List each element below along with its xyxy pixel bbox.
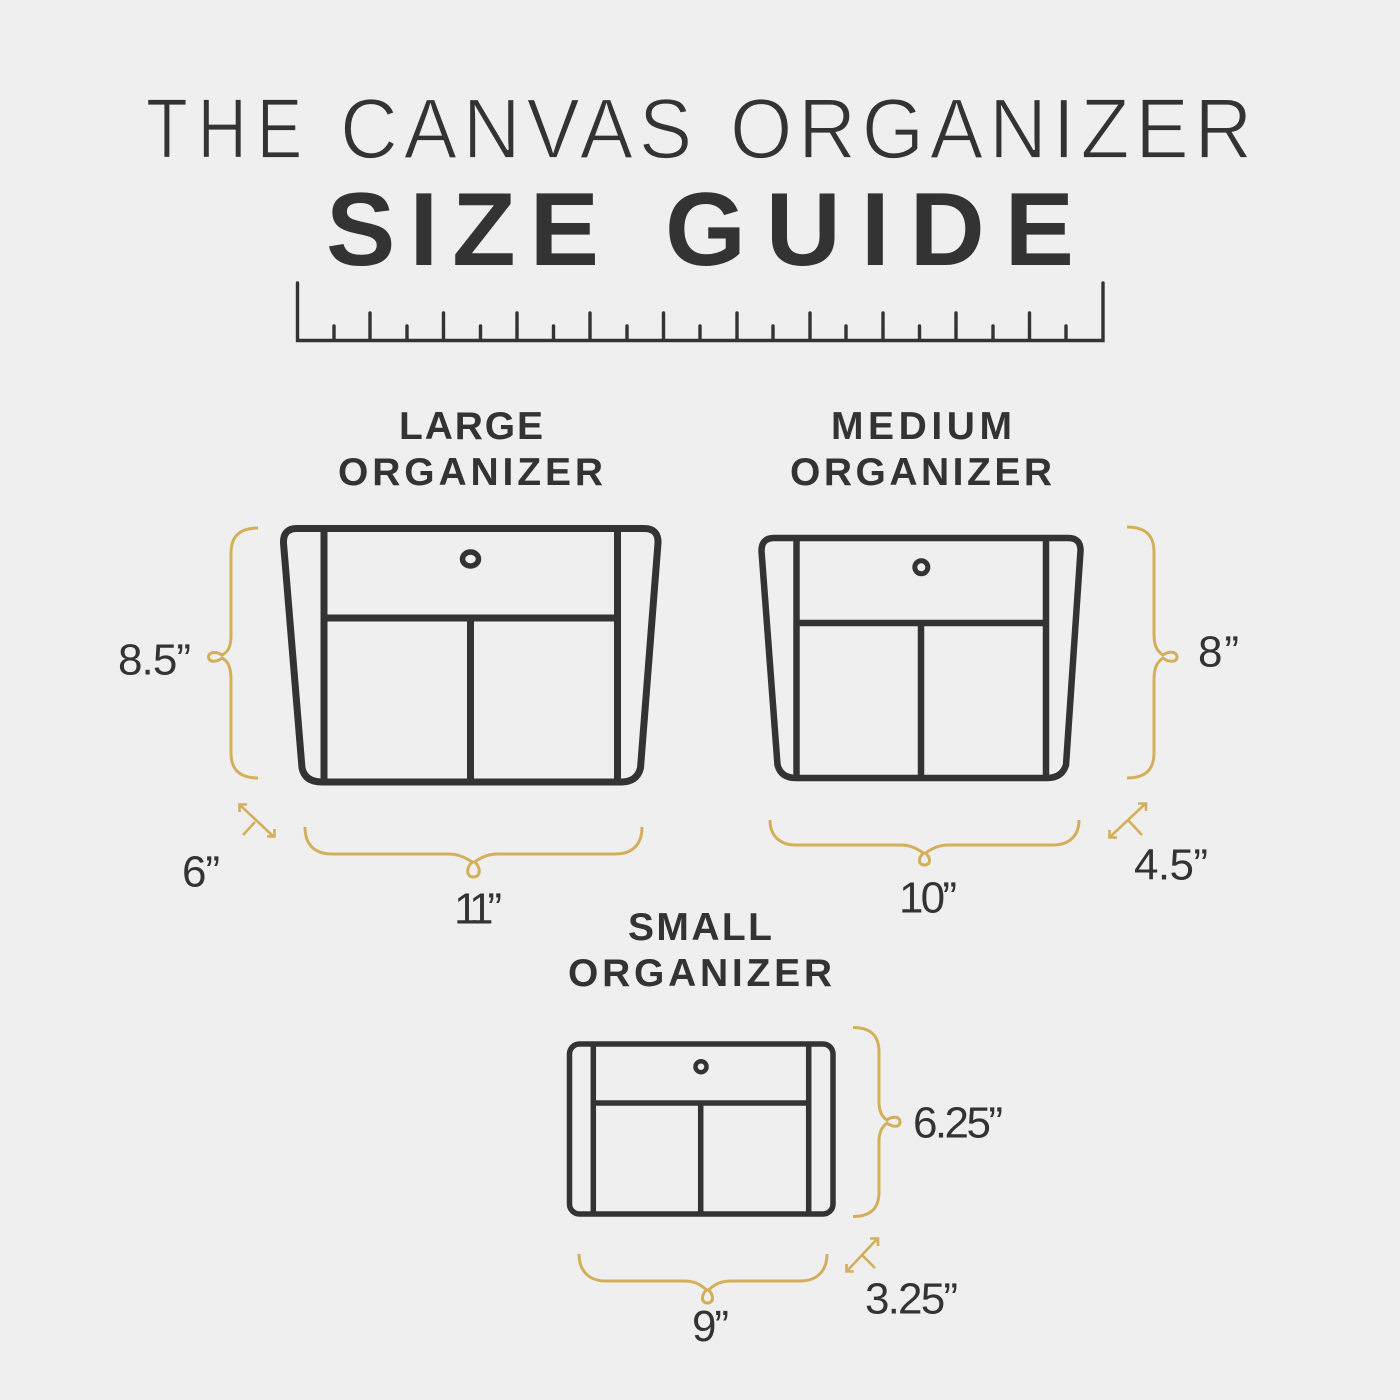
height brace [208,528,258,778]
title line: size guide: SIZE [326,172,599,288]
title [146,82,1258,288]
heading: small organizer: SMALL [628,906,772,949]
panel: small organizer [568,906,1003,1351]
title line: size guide [326,172,1074,288]
measurement: width: 11” [454,884,502,934]
measurement: width: 9” [692,1302,729,1351]
title line: the canvas organizer: ORGANIZER [730,82,1258,177]
depth arrow [846,1238,878,1272]
panel: large organizer [118,405,658,934]
height brace [1127,527,1177,778]
depth arrow [240,804,274,837]
measurement: height: 6.25” [913,1098,1003,1148]
icon: medium organizer outline [762,538,1081,780]
measurement: height: 8” [1198,628,1239,676]
heading: large organizer: ORGANIZER [338,451,603,494]
heading: medium organizer: MEDIUM [831,405,1012,448]
title line: the canvas organizer [146,82,1258,177]
heading: small organizer [568,906,832,995]
depth arrow [1110,804,1146,838]
width brace [579,1254,827,1303]
measurement: width: 10” [899,874,957,922]
icon: small organizer outline [570,1044,833,1214]
width brace [770,820,1079,865]
measurement: height: 8.5” [118,636,191,684]
measurement: depth: 6” [182,848,220,896]
icon: ruler [298,283,1103,340]
title line: the canvas organizer: CANVAS [340,82,698,177]
width brace [305,827,642,877]
title line: size guide: GUIDE [665,172,1074,288]
heading: large organizer: LARGE [399,405,543,448]
heading: large organizer [338,405,603,494]
heading: small organizer: ORGANIZER [568,952,832,995]
height brace [853,1028,900,1216]
icon: large organizer outline [283,528,658,785]
title line: the canvas organizer: THE [146,82,312,177]
panel: medium organizer [762,405,1239,922]
measurement: depth: 3.25” [865,1274,958,1324]
heading: medium organizer: ORGANIZER [790,451,1052,494]
measurement: depth: 4.5” [1134,840,1208,890]
heading: medium organizer [790,405,1052,494]
